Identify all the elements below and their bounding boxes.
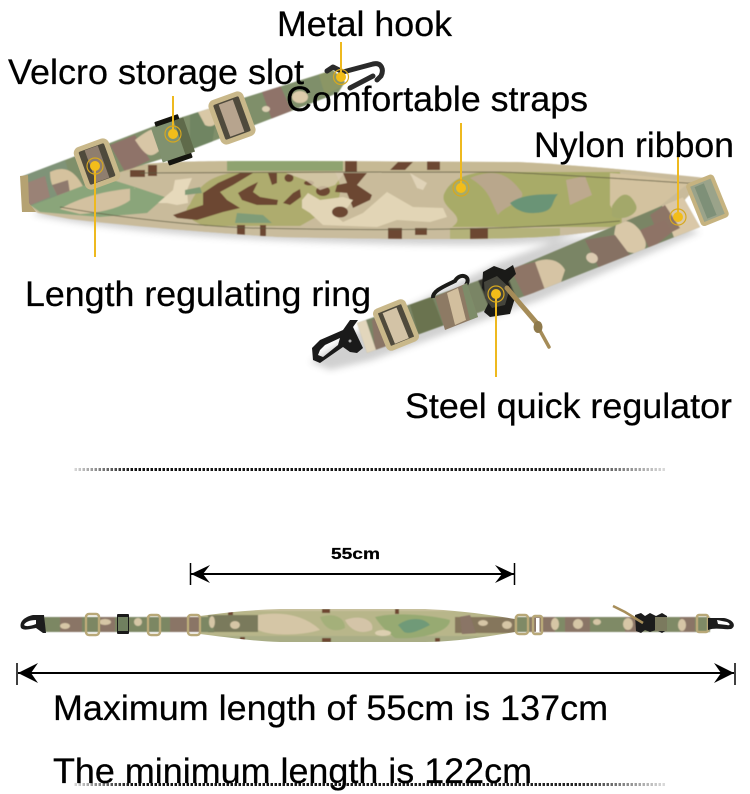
- right pad tones: [470, 173, 522, 215]
- label: nylon ribbon: Nylon ribbon: [534, 126, 734, 165]
- lower metal hook: [312, 320, 363, 363]
- text: minimum length: The minimum length is 122cm: [53, 752, 532, 791]
- stitching: [60, 207, 620, 230]
- folded camo band with black lugs: [433, 276, 478, 330]
- left hook: [21, 615, 46, 633]
- callout: steel regulator pointer: [488, 286, 504, 377]
- callout: comfortable straps pointer: [453, 123, 469, 196]
- callout: length ring pointer: [87, 158, 103, 257]
- label: comfortable straps: Comfortable straps: [286, 80, 588, 119]
- second regulating ring buckle: [210, 93, 254, 143]
- brown camouflage shapes: [173, 173, 253, 220]
- dimension label: 55cm: 55cm: [331, 546, 380, 563]
- left pad tones: [31, 180, 165, 218]
- label: metal hook: Metal hook: [277, 5, 452, 44]
- callout: metal hook pointer: [334, 42, 348, 84]
- lower regulating ring buckle: [375, 301, 417, 349]
- length regulating ring buckle: [75, 140, 119, 188]
- edge strips: [147, 161, 642, 172]
- product photo: full-length sling: [21, 605, 734, 645]
- left webbing strap: [22, 70, 346, 206]
- label: steel quick regulator: Steel quick regulator: [405, 387, 732, 426]
- dimension arrow: 55cm span: [190, 563, 514, 585]
- callout: nylon ribbon pointer: [670, 157, 686, 225]
- bottom dotted divider: [73, 783, 666, 786]
- webbing: right: [460, 615, 710, 634]
- bottom dotted divider gaps: [73, 783, 666, 786]
- regulator: [635, 613, 667, 633]
- pull cord with knot: [507, 288, 549, 347]
- lower webbing strap: [356, 198, 700, 353]
- text: maximum length: Maximum length of 55cm is 137cm: [53, 689, 608, 728]
- cord: [613, 606, 643, 623]
- white keeper slot: [536, 618, 540, 632]
- dimension arrow: full length: [17, 663, 735, 685]
- buckles: [86, 614, 708, 635]
- metal hook: [327, 64, 382, 88]
- brown edge tabs: [148, 165, 157, 176]
- padded shoulder strap: [30, 160, 703, 240]
- label: length regulating ring: Length regulating ring: [25, 275, 371, 314]
- padded section: [200, 609, 515, 642]
- webbing: left: [44, 616, 240, 632]
- velcro keeper: [117, 614, 129, 634]
- velcro storage slot band: [149, 113, 197, 167]
- pale camouflage shapes: [302, 192, 447, 227]
- steel quick regulator: [482, 265, 516, 317]
- callout: velcro slot pointer: [165, 96, 181, 142]
- right hook: [708, 618, 734, 630]
- dotted divider: [73, 468, 666, 471]
- dotted divider gaps: [73, 468, 666, 471]
- label: velcro storage slot: Velcro storage slot: [8, 53, 304, 92]
- product photo: large camouflage sling: [15, 60, 727, 370]
- left strap end buckle: [20, 175, 36, 212]
- right strap buckle: [688, 176, 727, 225]
